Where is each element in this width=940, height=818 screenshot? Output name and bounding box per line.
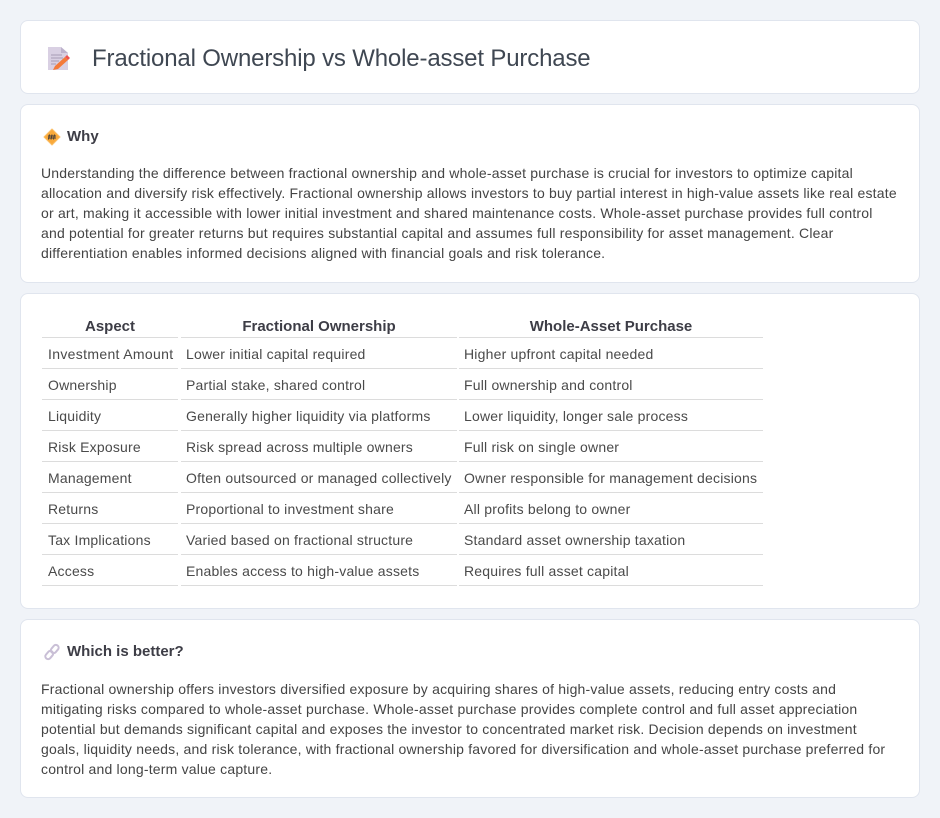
table: comparison: All profits belong to owner [464, 501, 630, 517]
table: comparison: Full ownership and control [464, 377, 633, 393]
table: comparison: Higher upfront capital needed [464, 346, 653, 362]
panel: which is better [20, 619, 920, 798]
table: comparison: Risk Exposure [48, 439, 141, 455]
table: comparison: Returns [48, 501, 98, 517]
table: comparison: Varied based on fractional structure [186, 532, 413, 548]
heading: which is better: Which is better? [67, 643, 184, 660]
text block: which is better explanation: potential but demands significant capital and exposes the investor to concentrated market risk. Decision depends on investment [41, 721, 857, 737]
table: comparison: Proportional to investment share [186, 501, 394, 517]
text block: which is better explanation [41, 681, 885, 777]
table: comparison: Liquidity [48, 408, 101, 424]
text block: why explanation: and potential for greater returns but requires substantial capital and assumes full responsibility for asset management. Clear [41, 225, 834, 241]
table: comparison: Fractional Ownership [242, 318, 396, 335]
table: comparison: Full risk on single owner [464, 439, 619, 455]
text block: which is better explanation: mitigating risks compared to whole-asset purchase. Whole-asset purchase provides complete control and full asset appreciation [41, 701, 857, 717]
table: comparison: Owner responsible for management decisions [464, 470, 757, 486]
table: comparison: Often outsourced or managed collectively [186, 470, 452, 486]
text block: why explanation: differentiation enables informed decisions aligned with financial goals and risk tolerance. [41, 245, 605, 261]
text block: why explanation: or art, making it accessible with lower initial investment and shared maintenance costs. Whole-asset purchase provides full control [41, 205, 873, 221]
text block: which is better explanation: goals, liquidity needs, and risk tolerance, with fractional ownership favored for diversification and whole-asset purchase preferred for [41, 741, 885, 757]
table: comparison: Tax Implications [48, 532, 151, 548]
panel: why [20, 104, 920, 283]
panel: comparison table [20, 293, 920, 609]
icon: document with pencil [48, 47, 70, 70]
table: comparison: Risk spread across multiple owners [186, 439, 413, 455]
table: comparison: Aspect [85, 318, 135, 335]
table: comparison: Lower liquidity, longer sale process [464, 408, 688, 424]
text block: why explanation [41, 165, 897, 261]
heading: why: Why [67, 128, 99, 145]
text block: why explanation: allocation and diversify risk effectively. Fractional ownership allows investors to buy partial interest in high-value assets like real estate [41, 185, 897, 201]
table: comparison: Access [48, 563, 94, 579]
table: comparison: Partial stake, shared control [186, 377, 365, 393]
text block: why explanation: Understanding the difference between fractional ownership and whole-asset purchase is crucial for investors to optimize capital [41, 165, 853, 181]
icon: chain link [44, 644, 60, 660]
table: comparison: Ownership [48, 377, 117, 393]
table: comparison: Standard asset ownership taxation [464, 532, 685, 548]
table: comparison: Generally higher liquidity via platforms [186, 408, 431, 424]
table: comparison [42, 318, 763, 586]
table: comparison: Management [48, 470, 132, 486]
table: comparison: Lower initial capital required [186, 346, 366, 362]
table: comparison: Requires full asset capital [464, 563, 629, 579]
table: comparison: Investment Amount [48, 346, 173, 362]
text block: which is better explanation: control and long-term value capture. [41, 761, 272, 777]
panel: title header [20, 20, 920, 94]
title: Fractional Ownership vs Whole-asset Purchase [92, 45, 590, 72]
text block: which is better explanation: Fractional ownership offers investors diversified exposure by acquiring shares of high-value assets, reducing entry costs and [41, 681, 836, 697]
table: comparison: Enables access to high-value assets [186, 563, 419, 579]
icon: warning diamond [44, 128, 60, 146]
table: comparison: Whole-Asset Purchase [530, 318, 692, 335]
